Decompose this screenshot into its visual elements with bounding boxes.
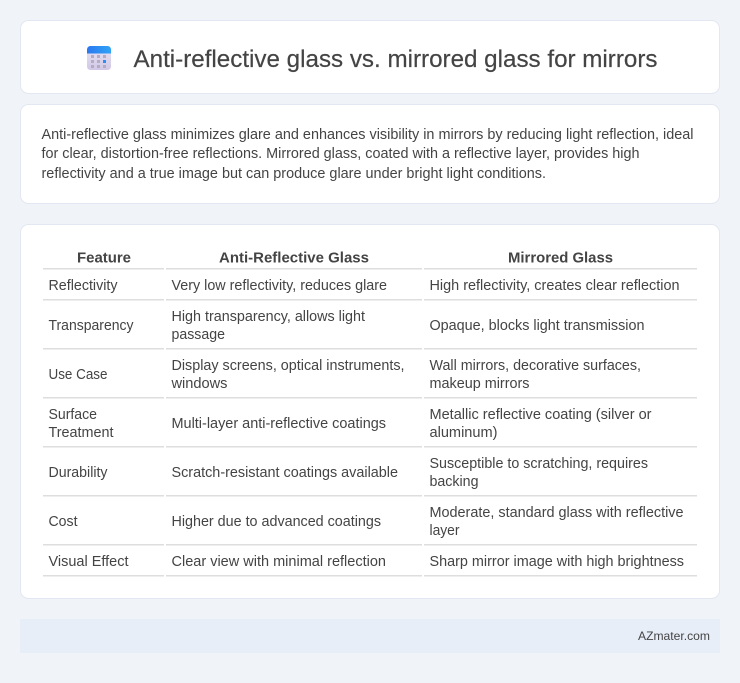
row: visual effect	[48, 554, 684, 570]
row: transparency: High transparency, allows light	[172, 309, 365, 325]
footer credit: AZmater.com	[638, 629, 710, 643]
icon: calendar	[87, 46, 111, 70]
row: transparency: passage	[172, 327, 225, 343]
row: reflectivity	[48, 278, 680, 294]
row: visual effect: Clear view with minimal reflection	[172, 554, 386, 570]
row: cost: layer	[430, 523, 460, 539]
row: transparency: Opaque, blocks light transmission	[430, 318, 644, 334]
footer bar	[20, 619, 720, 653]
row: surface treatment: Metallic reflective coating (silver or	[430, 407, 652, 423]
table header row: Feature	[77, 250, 131, 266]
row: cost: Moderate, standard glass with reflective	[430, 505, 684, 521]
row: durability: Scratch-resistant coatings available	[172, 465, 398, 481]
panel: title header	[20, 20, 720, 94]
row: durability	[48, 456, 648, 490]
row: surface treatment: Treatment	[48, 425, 114, 441]
row: durability: Durability	[48, 465, 108, 481]
row: visual effect: Sharp mirror image with high brightness	[430, 554, 684, 570]
row: cost	[48, 505, 684, 539]
row: use case: Wall mirrors, decorative surfaces,	[430, 358, 641, 374]
table header row: Mirrored Glass	[508, 250, 613, 266]
panel: comparison table	[20, 224, 720, 598]
row: use case: makeup mirrors	[430, 376, 530, 392]
panel: intro description	[20, 104, 720, 204]
row: use case: Display screens, optical instruments,	[172, 358, 404, 374]
row: use case: windows	[170, 376, 228, 392]
text block: intro: Anti-reflective glass minimizes glare and enhances visibility in mirrors by reducing light reflection, ideal	[42, 127, 694, 143]
row: surface treatment	[48, 407, 652, 441]
text block: intro: for clear, distortion-free reflections. Mirrored glass, coated with a reflective layer, provides high	[42, 146, 640, 162]
row: transparency: Transparency	[48, 318, 134, 334]
table header row	[77, 250, 613, 266]
text block: intro: reflectivity and a true image but can produce glare under bright light conditions.	[42, 166, 546, 182]
row: reflectivity: High reflectivity, creates clear reflection	[430, 278, 680, 294]
row: surface treatment: aluminum)	[430, 425, 498, 441]
row: use case: Use Case	[48, 367, 108, 383]
row: reflectivity: Reflectivity	[48, 278, 118, 294]
table header row: Anti-Reflective Glass	[219, 250, 369, 266]
row: visual effect: Visual Effect	[48, 554, 128, 570]
title: Anti-reflective glass vs. mirrored glass for mirrors	[134, 46, 658, 73]
row: durability: Susceptible to scratching, requires	[430, 456, 648, 472]
row: surface treatment: Multi-layer anti-reflective coatings	[172, 416, 386, 432]
row: use case	[48, 358, 641, 392]
text block: intro	[42, 127, 694, 182]
row: cost: Cost	[48, 514, 78, 530]
row: surface treatment: Surface	[48, 407, 97, 423]
row: transparency	[48, 309, 644, 343]
row: reflectivity: Very low reflectivity, reduces glare	[172, 278, 387, 294]
row: cost: Higher due to advanced coatings	[172, 514, 381, 530]
row: durability: backing	[430, 474, 478, 490]
